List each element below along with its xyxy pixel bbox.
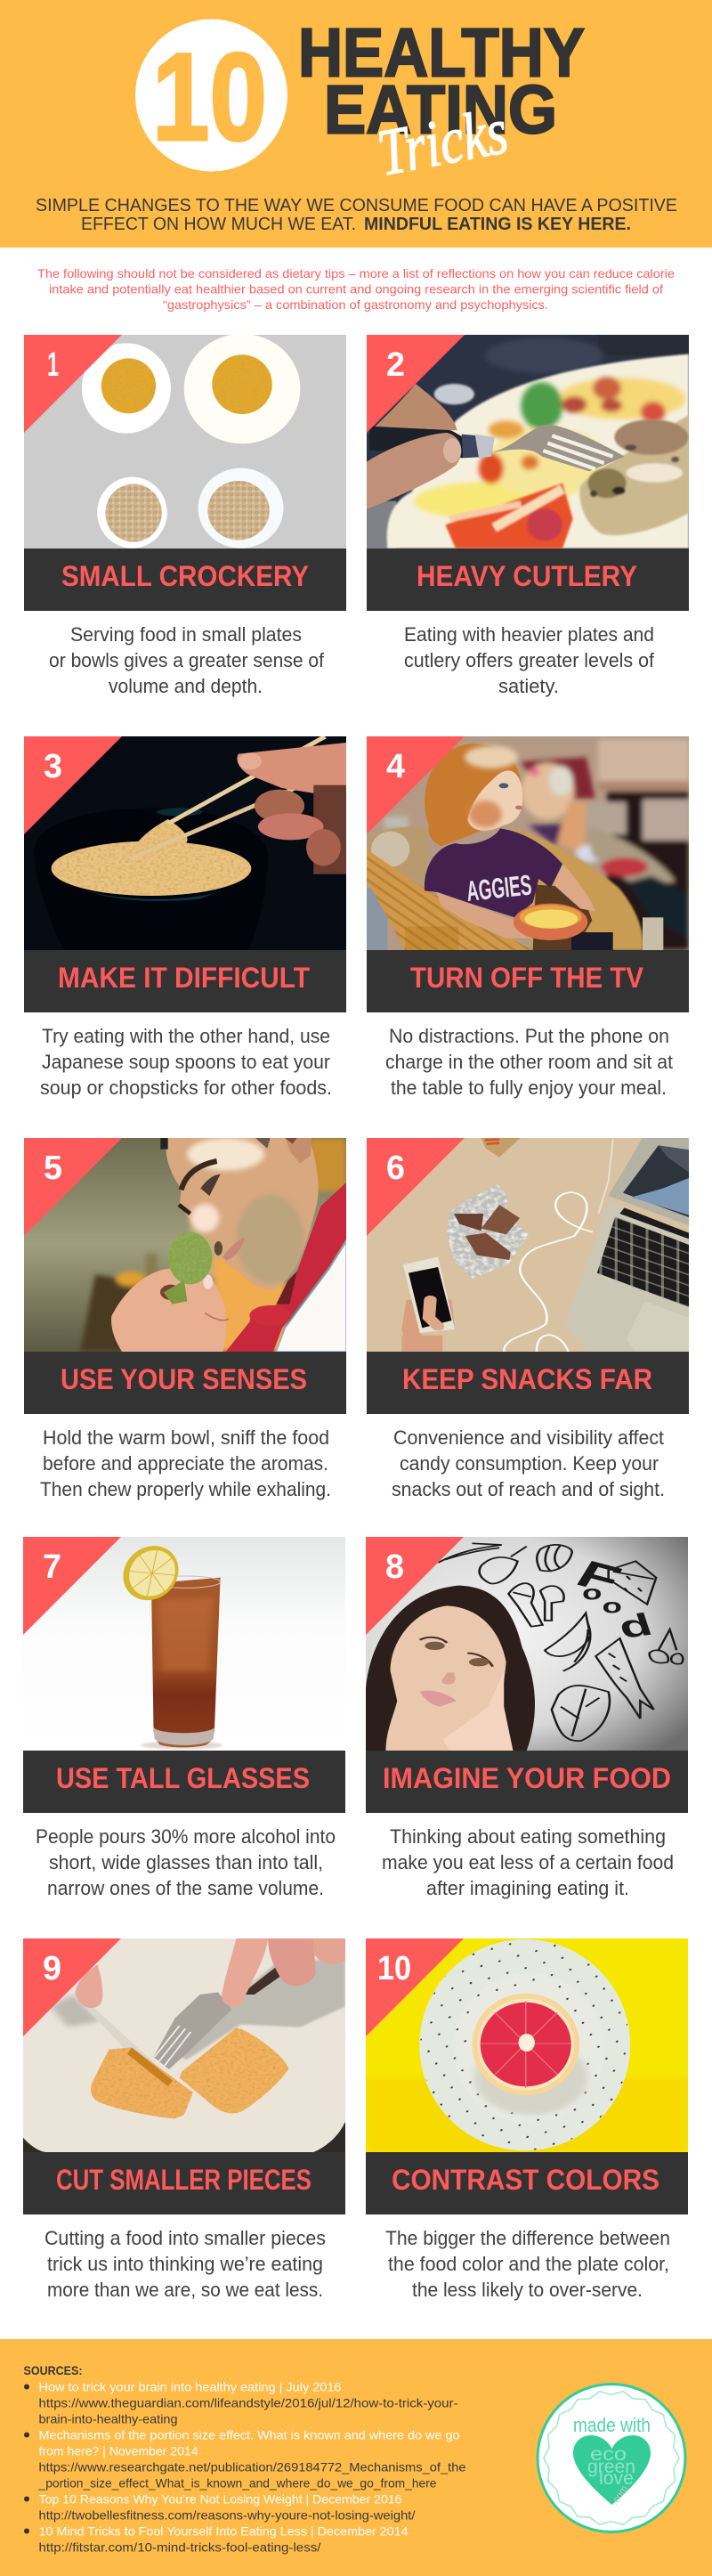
heading bar: MAKE IT DIFFICULT xyxy=(58,962,310,994)
description: Cutting a food into smaller pieces xyxy=(44,2227,326,2249)
badge: made with eco green love: love xyxy=(599,2468,634,2489)
subtitle: MINDFUL EATING IS KEY HERE. xyxy=(364,215,631,234)
number tab xyxy=(24,335,122,433)
description: the less likely to over-serve. xyxy=(412,2279,643,2301)
description xyxy=(40,1426,331,1500)
source 2: from here? | November 2014 xyxy=(39,2443,198,2458)
intro disclaimer text: intake and potentially eat healthier based on current and ongoing research in the emerging scientific field of xyxy=(49,281,663,296)
subtitle: SIMPLE CHANGES TO THE WAY WE CONSUME FOOD CAN HAVE A POSITIVE xyxy=(36,196,677,215)
description: before and appreciate the aromas. xyxy=(43,1452,328,1475)
number tab xyxy=(367,1138,465,1236)
heading bar: HEAVY CUTLERY xyxy=(417,560,637,592)
panel: 2 heavy cutlery xyxy=(367,335,689,697)
source 1: brain-into-healthy-eating xyxy=(39,2411,178,2426)
number tab: 8 xyxy=(385,1548,404,1586)
source 1 xyxy=(24,2379,458,2426)
number tab: 4 xyxy=(386,748,405,785)
description: the food color and the plate color, xyxy=(388,2253,669,2275)
photo: hand with fork over plate xyxy=(367,335,689,549)
heading bar xyxy=(23,1751,345,1813)
description: The bigger the difference between xyxy=(385,2227,670,2249)
number tab: 6 xyxy=(386,1150,405,1187)
photo: woman imagining food doodles: o xyxy=(603,1595,622,1618)
number tab: 10 xyxy=(377,1950,411,1987)
sources list xyxy=(23,2363,466,2554)
heading bar xyxy=(366,2152,688,2214)
description: the table to fully enjoy your meal. xyxy=(391,1077,667,1099)
number tab: 7 xyxy=(43,1548,61,1586)
badge: made with eco green love xyxy=(538,2385,685,2532)
description: candy consumption. Keep your xyxy=(400,1452,659,1475)
heading bar: TURN OFF THE TV xyxy=(410,962,644,994)
source 2: https://www.researchgate.net/publication/269184772_Mechanisms_of_the xyxy=(39,2459,466,2474)
heading bar xyxy=(367,950,689,1012)
source 3: http://twobellesfitness.com/reasons-why-youre-not-losing-weight/ xyxy=(39,2507,416,2522)
description: Hold the warm bowl, sniff the food xyxy=(43,1426,329,1449)
photo: grapefruit on dotted plate on yellow xyxy=(366,1938,688,2152)
description xyxy=(40,1025,332,1099)
number tab xyxy=(366,1537,464,1635)
sources list: SOURCES: xyxy=(23,2363,82,2377)
number tab xyxy=(367,736,465,834)
description: soup or chopsticks for other foods. xyxy=(40,1077,332,1099)
number tab: 9 xyxy=(43,1950,61,1987)
number tab xyxy=(24,1138,122,1236)
description xyxy=(49,623,325,697)
description: narrow ones of the same volume. xyxy=(47,1877,324,1899)
title: healthy eating: HEALTHY xyxy=(298,14,585,91)
panel: 9 cut smaller pieces xyxy=(23,1938,345,2301)
source 2: _portion_size_effect_What_is_known_and_where_do_we_go_from_here xyxy=(38,2475,437,2490)
heading bar: USE TALL GLASSES xyxy=(56,1762,310,1794)
heading bar xyxy=(24,549,346,611)
photo: woman imagining food doodles: F xyxy=(569,1552,629,1601)
panel: 6 keep snacks far xyxy=(367,1138,689,1500)
description xyxy=(404,623,655,697)
subtitle: EFFECT ON HOW MUCH WE EAT. xyxy=(81,215,356,234)
number tab xyxy=(23,1537,121,1635)
number tab: 3 xyxy=(44,748,62,785)
number tab xyxy=(367,335,465,433)
number tab: 2 xyxy=(386,346,405,384)
description xyxy=(385,2227,670,2301)
description: make you eat less of a certain food xyxy=(382,1851,674,1873)
description: volume and depth. xyxy=(109,675,263,697)
badge: number 10 in white circle: 10 xyxy=(152,27,267,167)
description: trick us into thinking we’re eating xyxy=(47,2253,323,2275)
description xyxy=(382,1825,674,1899)
title: healthy eating xyxy=(298,14,585,148)
description xyxy=(392,1426,665,1500)
description: People pours 30% more alcohol into xyxy=(36,1825,336,1848)
description: satiety. xyxy=(498,675,559,697)
description: Eating with heavier plates and xyxy=(404,623,654,646)
subtitle xyxy=(36,196,677,234)
description: after imagining eating it. xyxy=(426,1877,629,1899)
heading bar: KEEP SNACKS FAR xyxy=(402,1363,652,1395)
photo: plates of food on grey xyxy=(24,335,346,549)
badge: made with eco green love: green xyxy=(587,2457,635,2477)
description: No distractions. Put the phone on xyxy=(389,1025,669,1047)
photo: children watching tv with snacks: AGGIES xyxy=(465,868,533,907)
badge: made with eco green love: .com xyxy=(610,2483,630,2507)
panel: 5 use your senses xyxy=(24,1138,346,1500)
description xyxy=(385,1025,674,1099)
source 3: Top 10 Reasons Why You’re Not Losing Weight | December 2016 xyxy=(39,2491,402,2506)
heading bar: USE YOUR SENSES xyxy=(61,1363,307,1395)
badge: made with eco green love: eco xyxy=(590,2444,627,2465)
heading bar: CONTRAST COLORS xyxy=(392,2164,659,2196)
description: short, wide glasses than into tall, xyxy=(49,1851,323,1873)
description: Then chew properly while exhaling. xyxy=(40,1478,331,1500)
description: snacks out of reach and of sight. xyxy=(392,1478,665,1500)
description: charge in the other room and sit at xyxy=(385,1051,674,1073)
heading bar: SMALL CROCKERY xyxy=(61,560,309,592)
panel: 10 contrast colors xyxy=(366,1938,688,2301)
description xyxy=(44,2227,326,2301)
photo: woman imagining food doodles: d xyxy=(614,1607,657,1646)
number tab xyxy=(23,1938,121,2036)
heading bar xyxy=(366,1751,688,1813)
photo: woman imagining food doodles: o xyxy=(582,1582,602,1605)
source 2 xyxy=(24,2427,466,2490)
badge: made with eco green love: made with xyxy=(573,2414,651,2436)
photo: chef smelling herbs xyxy=(24,1138,346,1352)
number tab: 1 xyxy=(47,346,59,384)
photo: desk with laptop phone and chocolate xyxy=(367,1138,689,1352)
description: Thinking about eating something xyxy=(390,1825,666,1848)
source 4: http://fitstar.com/10-mind-tricks-fool-eating-less/ xyxy=(39,2539,321,2554)
panel: 1 small crockery xyxy=(24,334,346,697)
heading bar xyxy=(24,1352,346,1414)
heading bar xyxy=(24,950,346,1012)
intro disclaimer text: The following should not be considered as dietary tips – more a list of reflections on how you can reduce calorie xyxy=(37,266,675,280)
title: healthy eating: EATING xyxy=(324,71,557,148)
number tab xyxy=(24,736,122,834)
description: Japanese soup spoons to eat your xyxy=(42,1051,330,1073)
footer panel xyxy=(0,2339,712,2576)
heading bar xyxy=(367,549,689,611)
number tab: 5 xyxy=(44,1150,62,1187)
description: more than we are, so we eat less. xyxy=(47,2279,323,2301)
photo: cutting crackers with knife and fork xyxy=(23,1938,345,2152)
photo: chopsticks and noodle bowl xyxy=(24,736,346,950)
intro disclaimer text: “gastrophysics” – a combination of gastronomy and psychophysics. xyxy=(163,297,548,312)
description xyxy=(36,1825,336,1899)
source 2: Mechanisms of the portion size effect. What is known and where do we go xyxy=(39,2427,460,2442)
source 4 xyxy=(24,2523,409,2554)
source 1: How to trick your brain into healthy eating | July 2016 xyxy=(39,2379,342,2393)
panel: 3 make it difficult xyxy=(24,736,346,1099)
source 3 xyxy=(24,2491,416,2522)
description: Try eating with the other hand, use xyxy=(42,1025,330,1047)
heading bar xyxy=(23,2152,345,2214)
source 4: 10 Mind Tricks to Fool Yourself Into Eating Less | December 2014 xyxy=(39,2523,409,2538)
header panel xyxy=(0,0,712,248)
title: tricks script word: Tricks xyxy=(372,94,514,191)
photo: children watching tv with snacks xyxy=(367,736,689,950)
panel: 8 imagine your food xyxy=(366,1537,688,1899)
photo: tall iced tea glass with lemon xyxy=(53,1537,345,1751)
heading bar: CUT SMALLER PIECES xyxy=(56,2164,312,2196)
number tab xyxy=(366,1938,464,2036)
panel: 4 turn off the tv xyxy=(367,736,689,1099)
source 1: https://www.theguardian.com/lifeandstyle/2016/jul/12/how-to-trick-your- xyxy=(39,2395,458,2409)
intro disclaimer text xyxy=(37,266,675,312)
panel: 7 use tall glasses xyxy=(23,1537,345,1899)
description: or bowls gives a greater sense of xyxy=(49,649,325,671)
heading bar: IMAGINE YOUR FOOD xyxy=(383,1762,671,1794)
description: Convenience and visibility affect xyxy=(393,1426,665,1449)
description: Serving food in small plates xyxy=(70,623,302,646)
heading bar xyxy=(367,1352,689,1414)
description: cutlery offers greater levels of xyxy=(404,649,655,671)
photo: woman imagining food doodles xyxy=(366,1537,688,1751)
